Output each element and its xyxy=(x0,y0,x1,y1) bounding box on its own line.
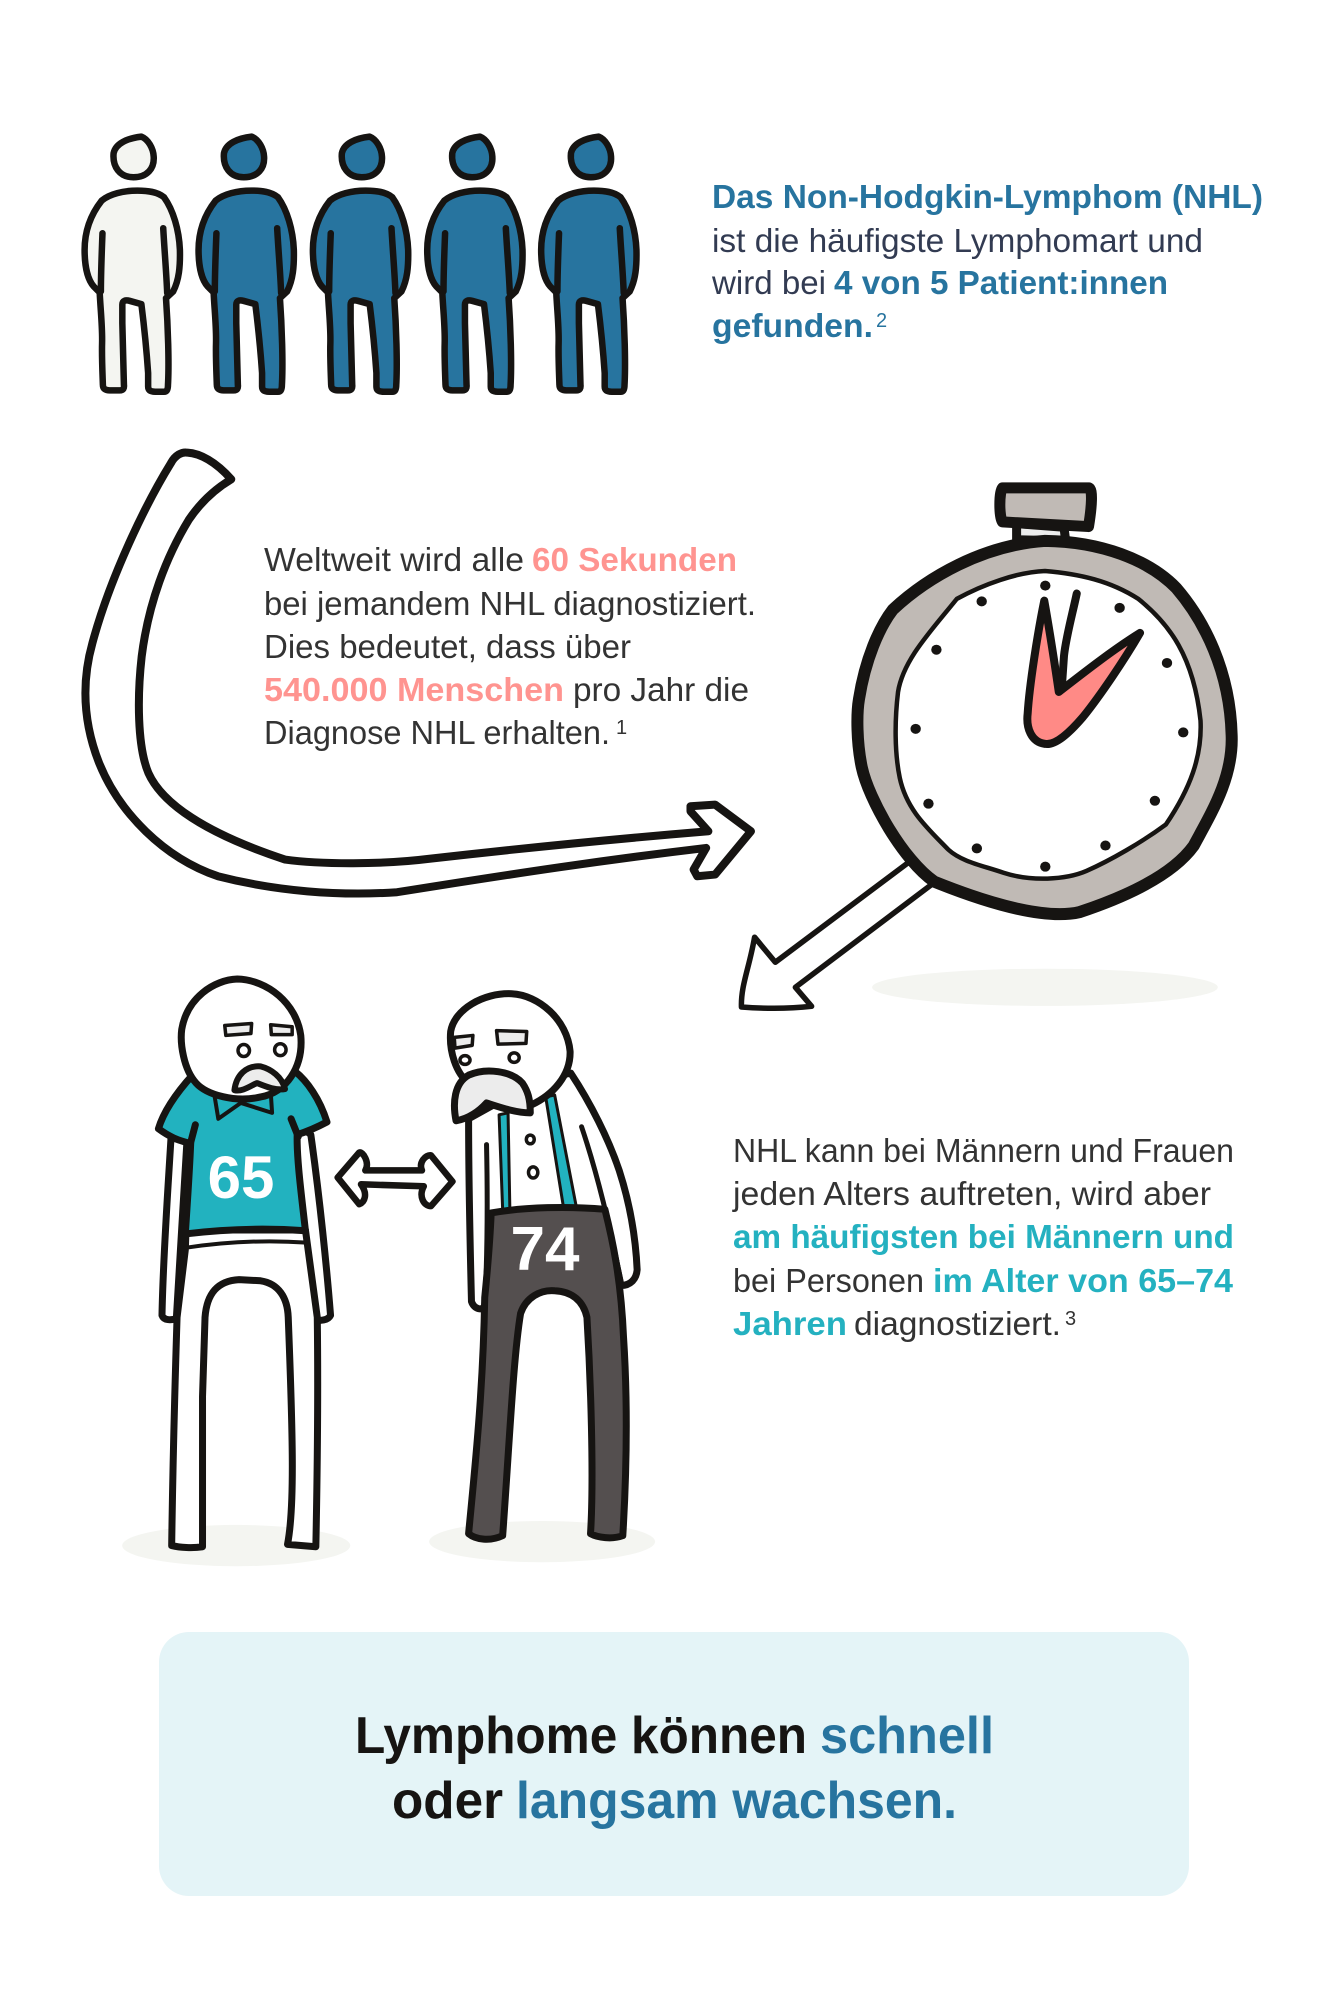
stopwatch with arrow xyxy=(741,488,1232,1008)
stopwatch face xyxy=(896,571,1201,879)
stopwatch button xyxy=(1000,488,1091,541)
text block: NHL frequency: gefunden. xyxy=(712,307,873,344)
text block: age and sex: jeden Alters auftreten, wird aber xyxy=(732,1175,1211,1212)
stopwatch ring xyxy=(857,541,1232,914)
callout text: schnell xyxy=(820,1707,994,1765)
shadow xyxy=(872,969,1218,1006)
text block: every 60 seconds: Diagnose NHL erhalten. xyxy=(264,714,610,751)
torso and arms xyxy=(469,1073,637,1309)
text block: every 60 seconds: Dies bedeutet, dass über xyxy=(264,628,631,665)
text block: NHL frequency: Das Non-Hodgkin-Lymphom (NHL) xyxy=(712,178,1263,215)
floor shadows xyxy=(122,1521,655,1566)
text block: NHL frequency xyxy=(711,178,1263,344)
man 74 xyxy=(450,994,637,1539)
text block: every 60 seconds: pro Jahr die xyxy=(573,671,749,708)
age number 74: 74 xyxy=(511,1215,580,1284)
curved arrow pointing to stopwatch xyxy=(85,452,751,894)
person: blue 2 xyxy=(313,137,408,392)
text block: every 60 seconds: 540.000 Menschen xyxy=(264,671,564,708)
text block: every 60 seconds: Weltweit wird alle xyxy=(264,541,524,578)
text block: age and sex: diagnostiziert. xyxy=(854,1305,1061,1342)
text block: age and sex: im Alter von 65–74 xyxy=(933,1262,1234,1299)
arms xyxy=(162,1139,187,1320)
man 65 xyxy=(158,979,331,1548)
trousers xyxy=(469,1207,626,1539)
text block: every 60 seconds: bei jemandem NHL diagnostiziert. xyxy=(264,585,756,622)
callout text: oder xyxy=(392,1772,503,1830)
text block: age and sex: am häufigsten bei Männern und xyxy=(733,1218,1234,1255)
thin clock hand xyxy=(1062,594,1077,681)
head xyxy=(450,994,570,1105)
red clock hands xyxy=(1027,601,1140,744)
text block: NHL frequency: 2 xyxy=(876,310,887,332)
panel: bottom callout xyxy=(159,1632,1189,1896)
hour dots xyxy=(910,581,1188,872)
person: blue 4 xyxy=(541,137,637,392)
head xyxy=(181,979,301,1099)
age number 65: 65 xyxy=(208,1144,274,1211)
text block: every 60 seconds: 60 Sekunden xyxy=(532,541,737,578)
person: blue 1 xyxy=(199,137,294,392)
callout text: Lymphome können xyxy=(355,1707,807,1765)
person: blue 3 xyxy=(427,137,523,392)
face xyxy=(225,1024,292,1091)
suspenders xyxy=(499,1095,576,1210)
text block: every 60 seconds xyxy=(264,541,756,751)
text block: NHL frequency: ist die häufigste Lymphomart und xyxy=(712,222,1203,259)
people row: 4 of 5 patients xyxy=(85,137,637,392)
text block: NHL frequency: 4 von 5 Patient:innen xyxy=(834,264,1168,301)
double arrow between men xyxy=(338,1152,452,1206)
collar xyxy=(215,1091,272,1119)
text block: NHL frequency: wird bei xyxy=(711,264,826,301)
arrow from stopwatch xyxy=(741,864,932,1008)
text block: age and sex: NHL kann bei Männern und Frauen xyxy=(733,1132,1234,1169)
buttons xyxy=(526,1135,534,1144)
legs xyxy=(172,1230,318,1548)
callout text xyxy=(355,1707,994,1830)
illustration: two men xyxy=(122,979,655,1566)
text block: age and sex: 3 xyxy=(1065,1308,1076,1330)
text block: every 60 seconds: 1 xyxy=(616,717,627,739)
text block: age and sex: Jahren xyxy=(733,1305,847,1342)
callout text: langsam wachsen. xyxy=(516,1772,957,1830)
shirt xyxy=(158,1071,327,1234)
person: white xyxy=(85,137,180,392)
text block: age and sex xyxy=(732,1132,1234,1342)
face xyxy=(454,1031,530,1121)
text block: age and sex: bei Personen xyxy=(733,1262,924,1299)
